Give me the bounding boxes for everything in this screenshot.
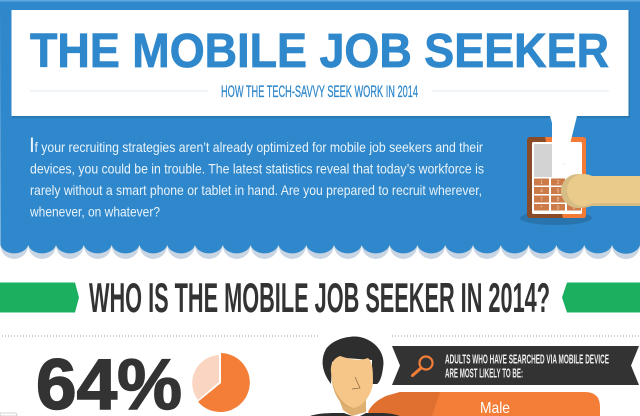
icon: phone held in hand: 7 (540, 197, 543, 203)
text block: introduction: f your recruiting strategies aren’t already optimized for mobile job seekers and their (34, 139, 483, 155)
text block: introduction: I (29, 134, 35, 157)
icon: phone held in hand: 2 (557, 180, 560, 186)
icon: phone held in hand: 4 (540, 188, 543, 194)
pie chart: 64 percent (192, 353, 250, 412)
panel: title speech bubble (12, 10, 630, 165)
subtitle: HOW THE TECH-SAVVY SEEK WORK IN 2014 (221, 83, 418, 101)
banner: left green ribbon (0, 282, 79, 312)
icon: phone held in hand: 9 (573, 197, 576, 203)
ribbon text: ARE MOST LIKELY TO BE: (445, 366, 523, 380)
icon: magnifying glass (412, 356, 432, 376)
card: partial box at bottom left (0, 413, 17, 416)
icon: phone held in hand (520, 112, 640, 225)
banner: right green ribbon (562, 282, 640, 312)
icon: phone held in hand: 6 (573, 188, 576, 194)
ribbon: adults who have searched (392, 346, 639, 385)
title: THE MOBILE JOB SEEKER (30, 25, 609, 78)
icon: phone held in hand: 1 (540, 180, 543, 186)
icon: phone held in hand: 8 (557, 197, 560, 203)
text block: introduction: whenever, on whatever? (29, 204, 160, 220)
text block: introduction: devices, you could be in trouble. The latest statistics reveal that today’s workforce is (30, 160, 484, 176)
panel: blue header background with scalloped edge (0, 0, 640, 259)
icon: phone held in hand: # (573, 206, 576, 212)
icon: phone held in hand: 5 (557, 188, 560, 194)
illustration: man (310, 336, 400, 416)
bar: male (368, 392, 600, 416)
ribbon text (445, 352, 609, 380)
icon: phone held in hand: 3 (573, 180, 576, 186)
icon: phone held in hand: 0 (557, 206, 560, 212)
text block: introduction (29, 134, 484, 220)
text block: introduction: rarely without a smart phone or tablet in hand. Are you prepared to recruit wherever, (30, 182, 482, 198)
icon: phone held in hand: * (541, 206, 543, 212)
